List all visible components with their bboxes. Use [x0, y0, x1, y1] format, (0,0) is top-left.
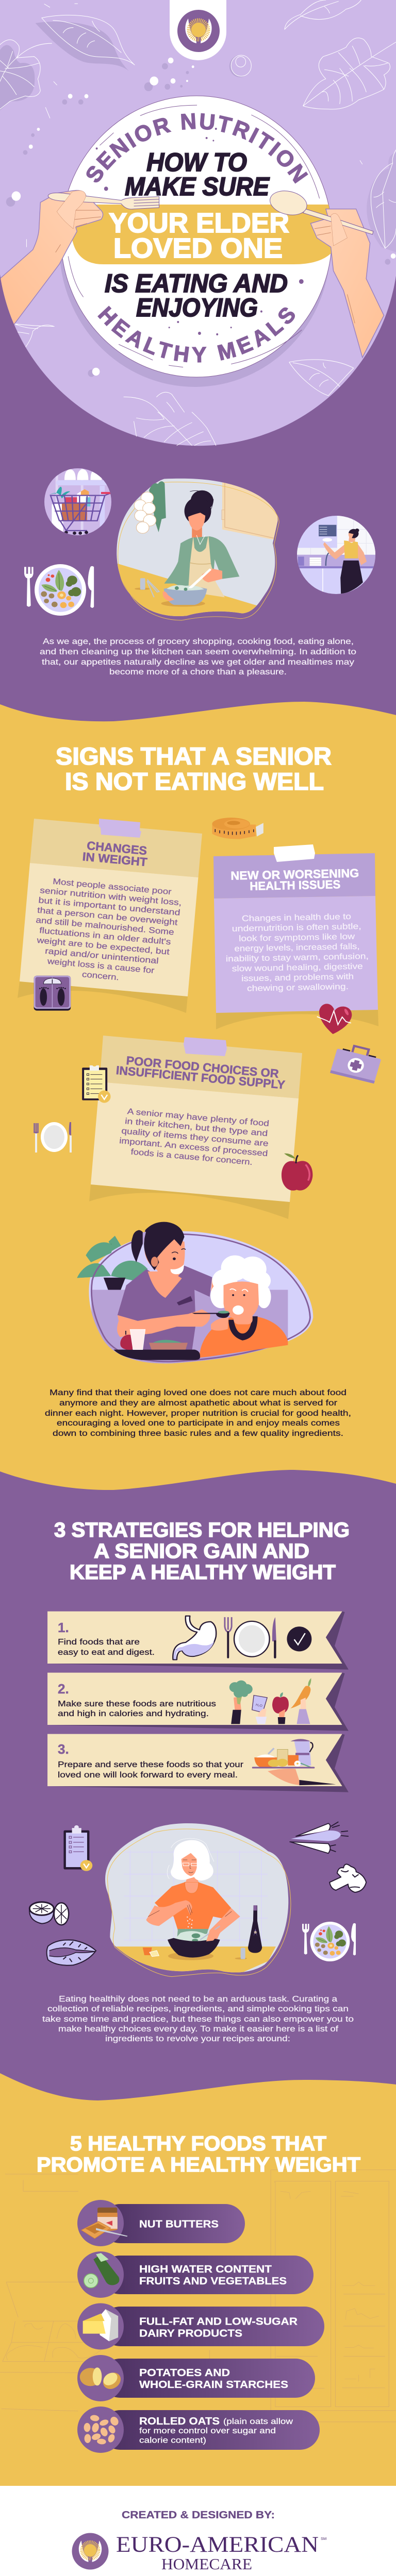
icon: hands holding healthy foods: H₂O [255, 1703, 262, 1708]
heading: INSUFFICIENT FOOD SUPPLY [116, 1063, 286, 1092]
icon: hands holding healthy foods [229, 1678, 311, 1724]
spoon [192, 1312, 230, 1318]
icon: potatoes [80, 2367, 124, 2393]
intro text: become more of a chore than a pleasure. [109, 668, 287, 676]
heading: 3 strategies: KEEP A HEALTHY WEIGHT [70, 1561, 336, 1584]
paragraph: eating healthily: Eating healthily does not need to be an arduous task. Curating a [59, 1995, 337, 2004]
heading: POOR FOOD CHOICES OR [126, 1054, 279, 1080]
strategy ribbon 2 [47, 1673, 349, 1731]
paragraph: many find: dinner each night. However, proper nutrition is crucial for good health, [45, 1409, 351, 1418]
body text: energy levels, increased falls, [234, 942, 360, 954]
heading: IN WEIGHT [82, 850, 148, 869]
paragraph: eating healthily [42, 1995, 354, 2043]
plate with title: LOVED ONE [113, 233, 283, 264]
body text [225, 912, 369, 993]
icon: serving tray [252, 1739, 336, 1785]
body text: issues, and problems with [241, 972, 354, 983]
heading: HEALTH ISSUES [250, 877, 341, 893]
body text: rapid and/or unintentional [45, 947, 159, 965]
purple page background [0, 0, 396, 732]
icon: weight scale [34, 976, 71, 1011]
strategy text 2: Make sure these foods are nutritious [58, 1700, 216, 1708]
plate with title [60, 96, 331, 387]
title: is eating and enjoying: IS EATING AND [105, 269, 288, 298]
food pill: potatoes [77, 2355, 315, 2401]
yellow foods section with wave [0, 2073, 396, 2486]
title: your elder loved one: YOUR ELDER [109, 208, 289, 239]
body text: but it is important to understand [38, 896, 180, 918]
plate with title: HEALTHY MEALS [97, 306, 295, 363]
body text: look for symptoms like low [239, 933, 355, 943]
food pill: water-rich produce: FRUITS AND VEGETABLES [139, 2276, 287, 2287]
plate with title: SENIOR NUTRITION [86, 113, 308, 183]
body text: undernutrition is often subtle, [232, 922, 361, 934]
nurse [117, 1222, 216, 1351]
logo: euro-american homecare: SM [321, 2536, 326, 2541]
illustration: woman tossing salad [113, 477, 280, 620]
heading: 3 strategies: 3 STRATEGIES FOR HELPING [54, 1519, 350, 1541]
heading: 5 healthy foods: PROMOTE A HEALTHY WEIGHT [37, 2154, 360, 2176]
strategy text 3: loved one will look forward to every meal. [58, 1771, 238, 1780]
white credits panel [0, 2486, 396, 2576]
title arc: healthy meals [68, 233, 326, 362]
body text: fluctuations in an older adult's [39, 926, 171, 947]
icon: nut butter [81, 2208, 127, 2239]
panel: new or worsening health issues [213, 844, 378, 1029]
food pill: nut butters [77, 2200, 245, 2246]
lavender hero circle [0, 0, 396, 446]
icon: plate with fork and knife [24, 564, 94, 616]
body text: A senior may have plenty of food [127, 1107, 270, 1128]
food pill: water-rich produce [77, 2251, 314, 2298]
right hand holding spoon [268, 188, 384, 358]
strategy text 3: Prepare and serve these foods so that your [58, 1760, 244, 1769]
illustration: cart [44, 468, 111, 535]
heading: 3 strategies: A SENIOR GAIN AND [94, 1540, 309, 1563]
heading: 5 healthy foods: 5 HEALTHY FOODS THAT [70, 2132, 326, 2155]
logo: euro-american homecare: EURO-AMERICAN [116, 2533, 319, 2557]
intro text: and then cleaning up the kitchen can seem overwhelming. In addition to [40, 648, 356, 656]
paragraph: many find [45, 1388, 351, 1438]
title: how to make sure: HOW TO [146, 148, 247, 177]
body text: quality of items they consume are [121, 1127, 269, 1148]
paragraph: eating healthily: collection of reliable recipes, ingredients, and simple cooking tips can [47, 2005, 349, 2013]
heading: 5 healthy foods [37, 2132, 360, 2176]
food pill: rolled oats: ROLLED OATS [139, 2416, 220, 2427]
icon: plate with fork and knife [302, 1922, 356, 1961]
heading: CHANGES [86, 839, 147, 857]
food pill: nut butters: NUT BUTTERS [139, 2218, 219, 2230]
heading: signs [56, 742, 332, 795]
tape [99, 819, 141, 838]
food pill: dairy: FULL-FAT AND LOW-SUGAR [139, 2316, 298, 2328]
hero decorative leaves [0, 0, 396, 412]
body text: that a person can be overweight [37, 906, 178, 927]
body text: slow wound healing, digestive [232, 962, 363, 973]
illustration: caregiver feeding senior [77, 1222, 313, 1364]
strategy text 1: 1. [58, 1620, 69, 1635]
strategy text 2: and high in calories and hydrating. [58, 1709, 209, 1718]
food pill: potatoes: POTATOES AND [139, 2367, 230, 2379]
paragraph: eating healthily: take some time and practice, but these things can also empower you to [42, 2015, 354, 2024]
food pill: dairy [77, 2303, 324, 2349]
icon: clipboard [82, 1062, 111, 1103]
body text: and still be malnourished. Some [36, 916, 174, 937]
icon: salmon steak [47, 1940, 96, 1965]
body text: foods is a cause for concern. [130, 1148, 253, 1167]
icon: heart with pulse [317, 1004, 352, 1034]
illustration: senior woman cooking [105, 1823, 291, 1977]
paragraph: many find: anymore and they are almost apathetic about what is served for [59, 1399, 338, 1408]
plate with title: ENJOYING [136, 293, 258, 322]
strategy text 3 [58, 1741, 244, 1780]
strategy text 2 [58, 1681, 216, 1718]
logo: euro-american homecare [72, 2533, 326, 2573]
intro text [40, 637, 356, 676]
food pill: rolled oats: for more control over sugar and [139, 2427, 276, 2435]
body text: in their kitchen, but the type and [124, 1117, 268, 1138]
icon: first aid kit [330, 1042, 383, 1083]
panel: changes in weight [18, 819, 202, 1013]
food pill: rolled oats [77, 2406, 320, 2453]
icon: oats [84, 2414, 120, 2445]
strategy text 3: 3. [58, 1741, 69, 1757]
logo tab [170, 0, 226, 60]
heading [230, 866, 359, 893]
strategy ribbon 3 [47, 1734, 349, 1792]
icon: cauliflower [329, 1864, 366, 1892]
strategy text 1 [58, 1620, 155, 1657]
body text [31, 876, 183, 987]
heading: signs: IS NOT EATING WELL [65, 768, 324, 795]
logo mark [177, 10, 220, 52]
paragraph: eating healthily: make healthy choices every day. To make it easier here is a list of [58, 2025, 339, 2033]
purple strategies section with wave [0, 1470, 396, 2092]
background kitchen line art [0, 2170, 396, 2422]
body text [118, 1107, 271, 1168]
heading [82, 838, 149, 869]
body text: chewing or swallowing. [247, 982, 349, 993]
intro text: that, our appetites naturally decline as we get older and mealtimes may [42, 658, 354, 667]
strategy ribbon 1 [47, 1612, 349, 1670]
strategy text 2: 2. [58, 1681, 69, 1697]
plate with title: MAKE SURE [125, 172, 270, 201]
paragraph: eating healthily: ingredients to revolve your recipes around: [105, 2035, 290, 2043]
icon: clipboard lavender [63, 1825, 92, 1871]
heading: 3 strategies [54, 1519, 350, 1584]
food pill: rolled oats: (plain oats allow [223, 2417, 293, 2426]
heading: signs: SIGNS THAT A SENIOR [56, 742, 332, 770]
tape [274, 844, 315, 862]
illustration: woman washing dishes [297, 516, 375, 594]
icon: parsnips [289, 1822, 349, 1853]
left hand holding fork [0, 190, 159, 325]
body text: important. An excess of processed [119, 1137, 268, 1158]
icon: apple [282, 1154, 312, 1191]
title arc: senior nutrition [80, 129, 313, 245]
yellow title band [72, 205, 331, 264]
body text: weight loss is a cause for [46, 957, 155, 975]
body text: Changes in health due to [242, 912, 351, 923]
icon: cheese and milk [83, 2309, 118, 2341]
icon: stomach, plate, check [173, 1616, 311, 1659]
bottom hero leaf [134, 412, 216, 446]
tray with meal [113, 1329, 200, 1360]
heading: NEW OR WORSENING [230, 866, 359, 883]
body text: Most people associate poor [53, 877, 172, 896]
body text: senior nutrition with weight loss, [39, 886, 182, 907]
icon: cucumber [84, 2253, 119, 2288]
body text: inability to stay warm, confusion, [226, 952, 369, 963]
icon: small plate [34, 1122, 71, 1153]
paragraph: many find: encouraging a loved one to participate in and enjoy meals comes [57, 1419, 340, 1428]
paragraph: many find: Many find that their aging loved one does not care much about food [50, 1388, 346, 1397]
plant [77, 1236, 148, 1281]
logo: euro-american homecare: HOMECARE [161, 2555, 252, 2573]
panel: poor food choices [89, 1036, 302, 1219]
strategy text 1: easy to eat and digest. [58, 1648, 155, 1657]
body text: weight are to be expected, but [36, 936, 170, 957]
senior [200, 1256, 288, 1358]
credits heading: CREATED & DESIGNED BY: [122, 2510, 275, 2521]
food pill: rolled oats: calorie content) [139, 2436, 206, 2445]
food pill: dairy: DAIRY PRODUCTS [139, 2328, 242, 2339]
strategy text 1: Find foods that are [58, 1638, 140, 1647]
body text: concern. [81, 970, 120, 982]
paragraph: many find: down to combining three basic rules and a few quality ingredients. [53, 1429, 343, 1438]
food pill: potatoes: WHOLE-GRAIN STARCHES [139, 2379, 288, 2391]
icon: tape measure [212, 818, 263, 839]
yellow section with wave [0, 702, 396, 1494]
tape [184, 1037, 227, 1056]
intro text: As we age, the process of grocery shopping, cooking food, eating alone, [43, 637, 354, 646]
icon: lemon [29, 1902, 69, 1925]
food pill: water-rich produce: HIGH WATER CONTENT [139, 2264, 272, 2275]
